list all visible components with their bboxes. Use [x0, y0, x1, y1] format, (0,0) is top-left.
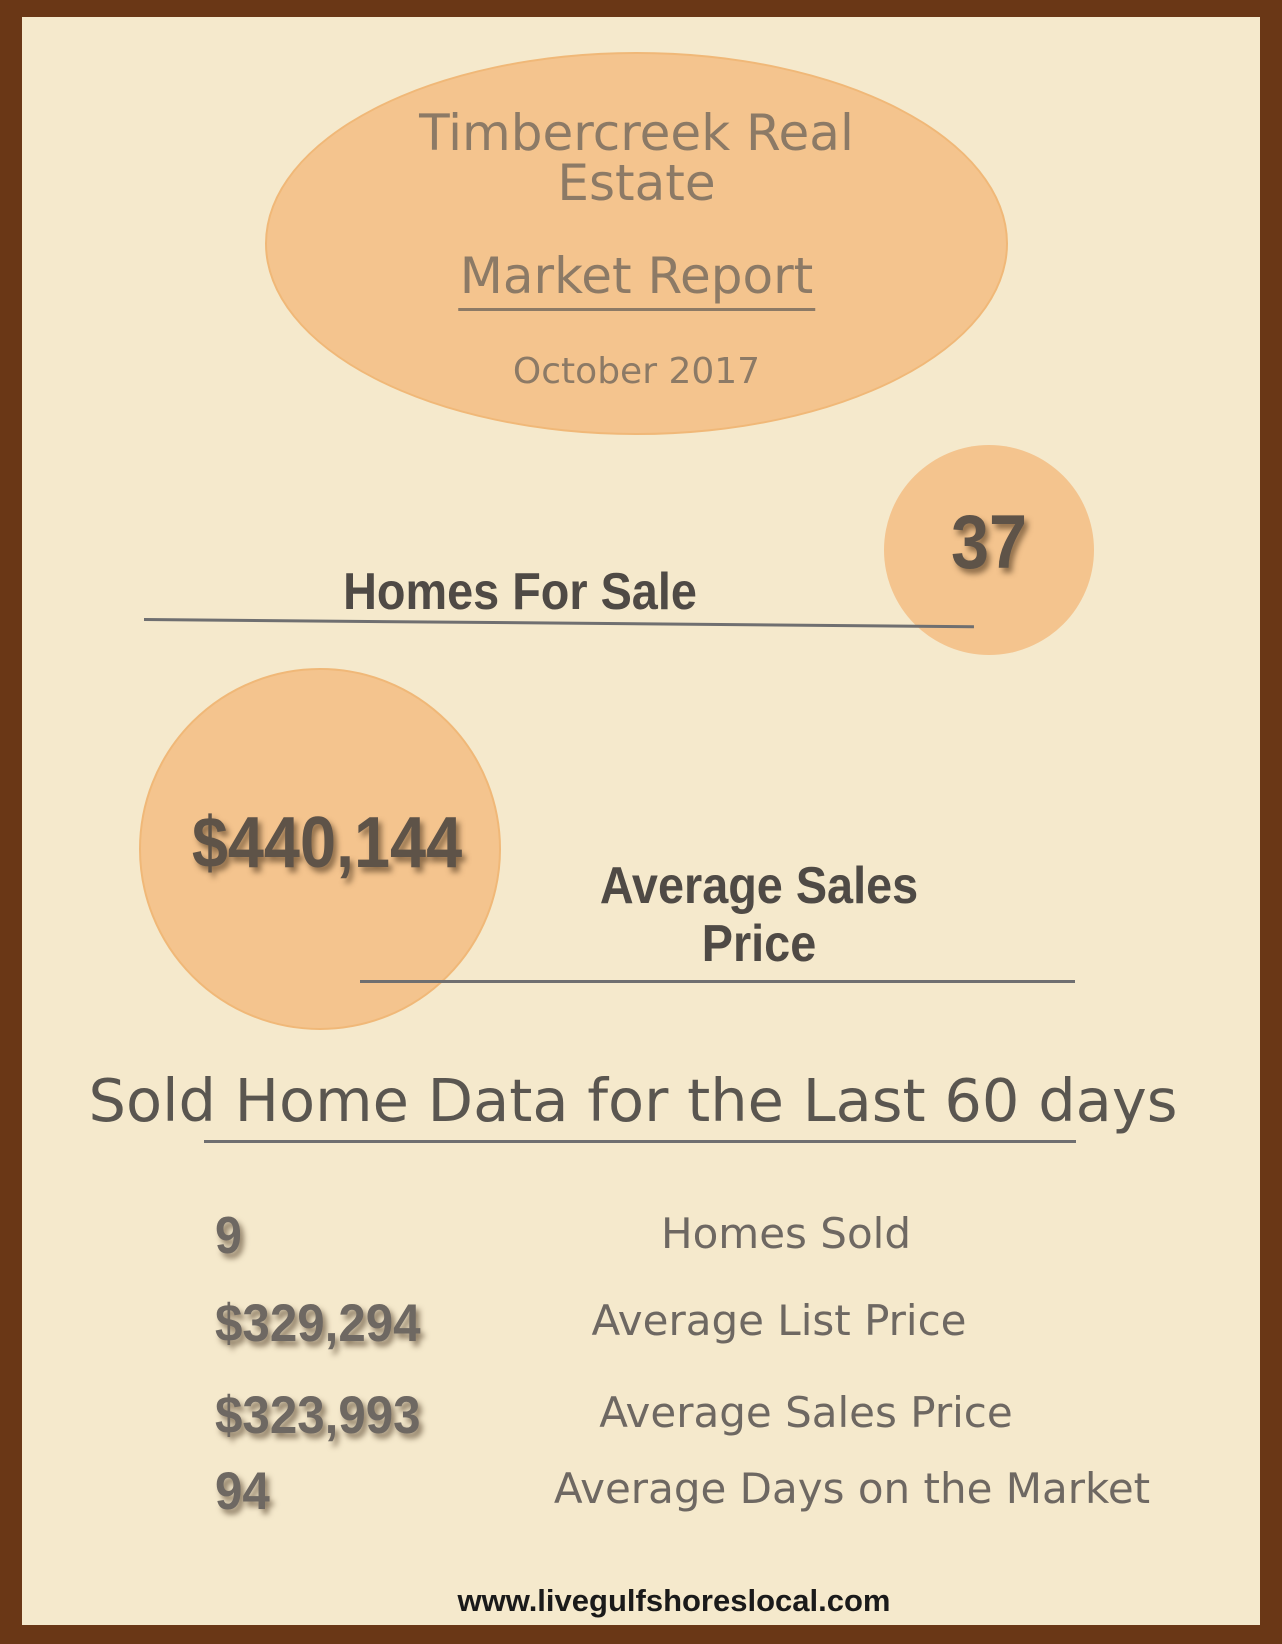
value 440,144: $440,144 — [192, 803, 462, 883]
title: Estate — [557, 154, 716, 212]
label: average sales price — [600, 857, 918, 973]
subtitle: market report: Market Report — [460, 247, 813, 305]
stats table: Average Days on the Market — [554, 1464, 1150, 1513]
label: average sales price: Price — [702, 915, 816, 973]
row: average sales price: $323,993 — [215, 1386, 421, 1445]
stats table — [215, 1207, 1150, 1521]
date: October 2017 — [513, 351, 760, 392]
title: Timbercreek Real — [419, 104, 854, 162]
row: average list price: $329,294 — [215, 1294, 421, 1353]
circle: average sales price — [139, 668, 501, 1030]
header ellipse — [265, 52, 1008, 435]
footer url: www.livegulfshoreslocal.com — [458, 1583, 890, 1618]
title — [419, 104, 854, 212]
stats table: Average Sales Price — [599, 1388, 1013, 1437]
label: homes for sale: Homes For Sale — [343, 563, 697, 621]
stats table: Homes Sold — [661, 1209, 911, 1258]
label: average sales price: Average Sales — [600, 857, 918, 915]
section heading: Sold Home Data for the Last 60 days — [89, 1066, 1177, 1135]
circle: homes for sale count — [884, 445, 1094, 655]
row: homes sold: 9 — [215, 1207, 242, 1265]
stats table: Average List Price — [591, 1296, 967, 1345]
number 37: 37 — [951, 500, 1027, 585]
row: days on market: 94 — [215, 1462, 270, 1521]
